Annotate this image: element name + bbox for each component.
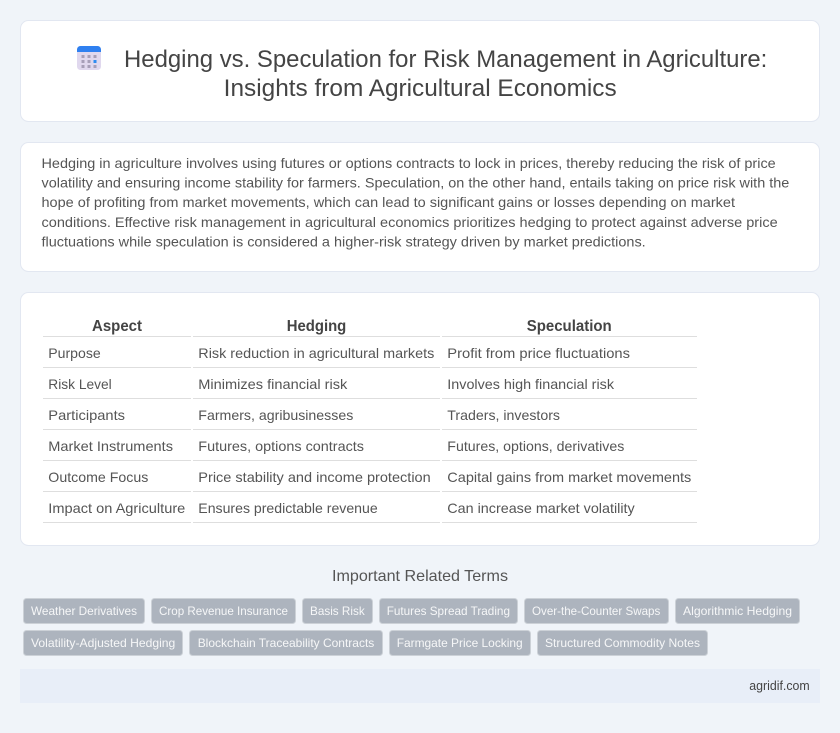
text block: summary paragraph: fluctuations while speculation is considered a higher-risk strategy driven by market predictions. [42, 233, 646, 249]
text block: summary paragraph: Hedging in agriculture involves using futures or options contracts to lock in prices, thereby reducing the risk of price [42, 155, 776, 171]
table row: outcome focus: Capital gains from market movements [447, 469, 691, 485]
tag: futures spread trading [380, 598, 518, 624]
table row: impact on agriculture: Impact on Agriculture [48, 500, 186, 516]
table row: participants: Traders, investors [447, 407, 560, 423]
tag: crop revenue insurance [152, 598, 296, 624]
table row: risk level: Risk Level [48, 376, 112, 392]
table row: outcome focus [43, 469, 697, 492]
tag: weather derivatives: Weather Derivatives [31, 604, 137, 618]
table header: Speculation [527, 318, 612, 335]
table row: purpose: Purpose [48, 345, 101, 361]
table row: purpose [43, 345, 697, 368]
tag: blockchain traceability contracts: Blockchain Traceability Contracts [198, 636, 374, 650]
footer [20, 669, 820, 703]
tag: over-the-counter swaps [524, 598, 668, 624]
table row: participants [43, 407, 697, 430]
table row: impact on agriculture [43, 500, 697, 523]
tag: farmgate price locking [390, 630, 530, 656]
icon: calendar [77, 46, 101, 70]
text block: summary paragraph: volatility and ensuring income stability for farmers. Speculation, on the other hand, entails taking on price risk with the [42, 175, 790, 191]
table header [43, 318, 697, 337]
tag list: related terms [24, 598, 800, 656]
table row: risk level: Minimizes financial risk [198, 376, 348, 392]
table header: Hedging [287, 318, 346, 335]
footer text: site name: agridif.com [749, 678, 810, 693]
table row: risk level: Involves high financial risk [447, 376, 615, 392]
table row: market instruments: Futures, options, derivatives [447, 438, 624, 454]
table row: risk level [43, 376, 697, 399]
table row: outcome focus: Outcome Focus [48, 469, 148, 485]
table row: market instruments: Futures, options contracts [198, 438, 364, 454]
table row: market instruments: Market Instruments [48, 438, 173, 454]
tag: volatility-adjusted hedging [24, 630, 182, 656]
table row: impact on agriculture: Can increase market volatility [447, 500, 635, 516]
tag: structured commodity notes: Structured Commodity Notes [545, 636, 700, 650]
text block: summary paragraph [42, 155, 790, 249]
title: Insights from Agricultural Economics [224, 75, 617, 102]
tag: structured commodity notes [538, 630, 708, 656]
panel: summary [20, 142, 820, 272]
text block: summary paragraph: conditions. Effective risk management in agricultural economics prioritizes hedging to protect against adverse price [42, 214, 778, 230]
panel: header [20, 20, 820, 122]
table row: participants: Farmers, agribusinesses [198, 407, 353, 423]
tag: futures spread trading: Futures Spread Trading [387, 604, 510, 618]
tag: algorithmic hedging [676, 598, 800, 624]
tag: volatility-adjusted hedging: Volatility-Adjusted Hedging [31, 636, 175, 650]
table row: participants: Participants [48, 407, 125, 423]
table row: outcome focus: Price stability and income protection [198, 469, 431, 485]
table header: Aspect [92, 318, 143, 335]
tag: algorithmic hedging: Algorithmic Hedging [683, 604, 792, 618]
tag: crop revenue insurance: Crop Revenue Insurance [159, 604, 288, 618]
table row: market instruments [43, 438, 697, 461]
tag: basis risk [302, 598, 372, 624]
tag: basis risk: Basis Risk [310, 604, 366, 618]
table row: impact on agriculture: Ensures predictable revenue [198, 500, 378, 516]
title: Hedging vs. Speculation for Risk Management in Agriculture: [124, 46, 767, 73]
table row: purpose: Risk reduction in agricultural markets [198, 345, 434, 361]
table row: purpose: Profit from price fluctuations [447, 345, 630, 361]
tag: over-the-counter swaps: Over-the-Counter Swaps [532, 604, 660, 618]
tag: blockchain traceability contracts [190, 630, 382, 656]
panel: comparison table [20, 292, 820, 546]
heading: important related terms: Important Related Terms [332, 568, 508, 585]
title [124, 46, 767, 102]
tag: weather derivatives [24, 598, 144, 624]
text block: summary paragraph: hope of profiting from market movements, which can lead to significant gains or losses depending on market [42, 194, 735, 210]
tag: farmgate price locking: Farmgate Price Locking [397, 636, 523, 650]
